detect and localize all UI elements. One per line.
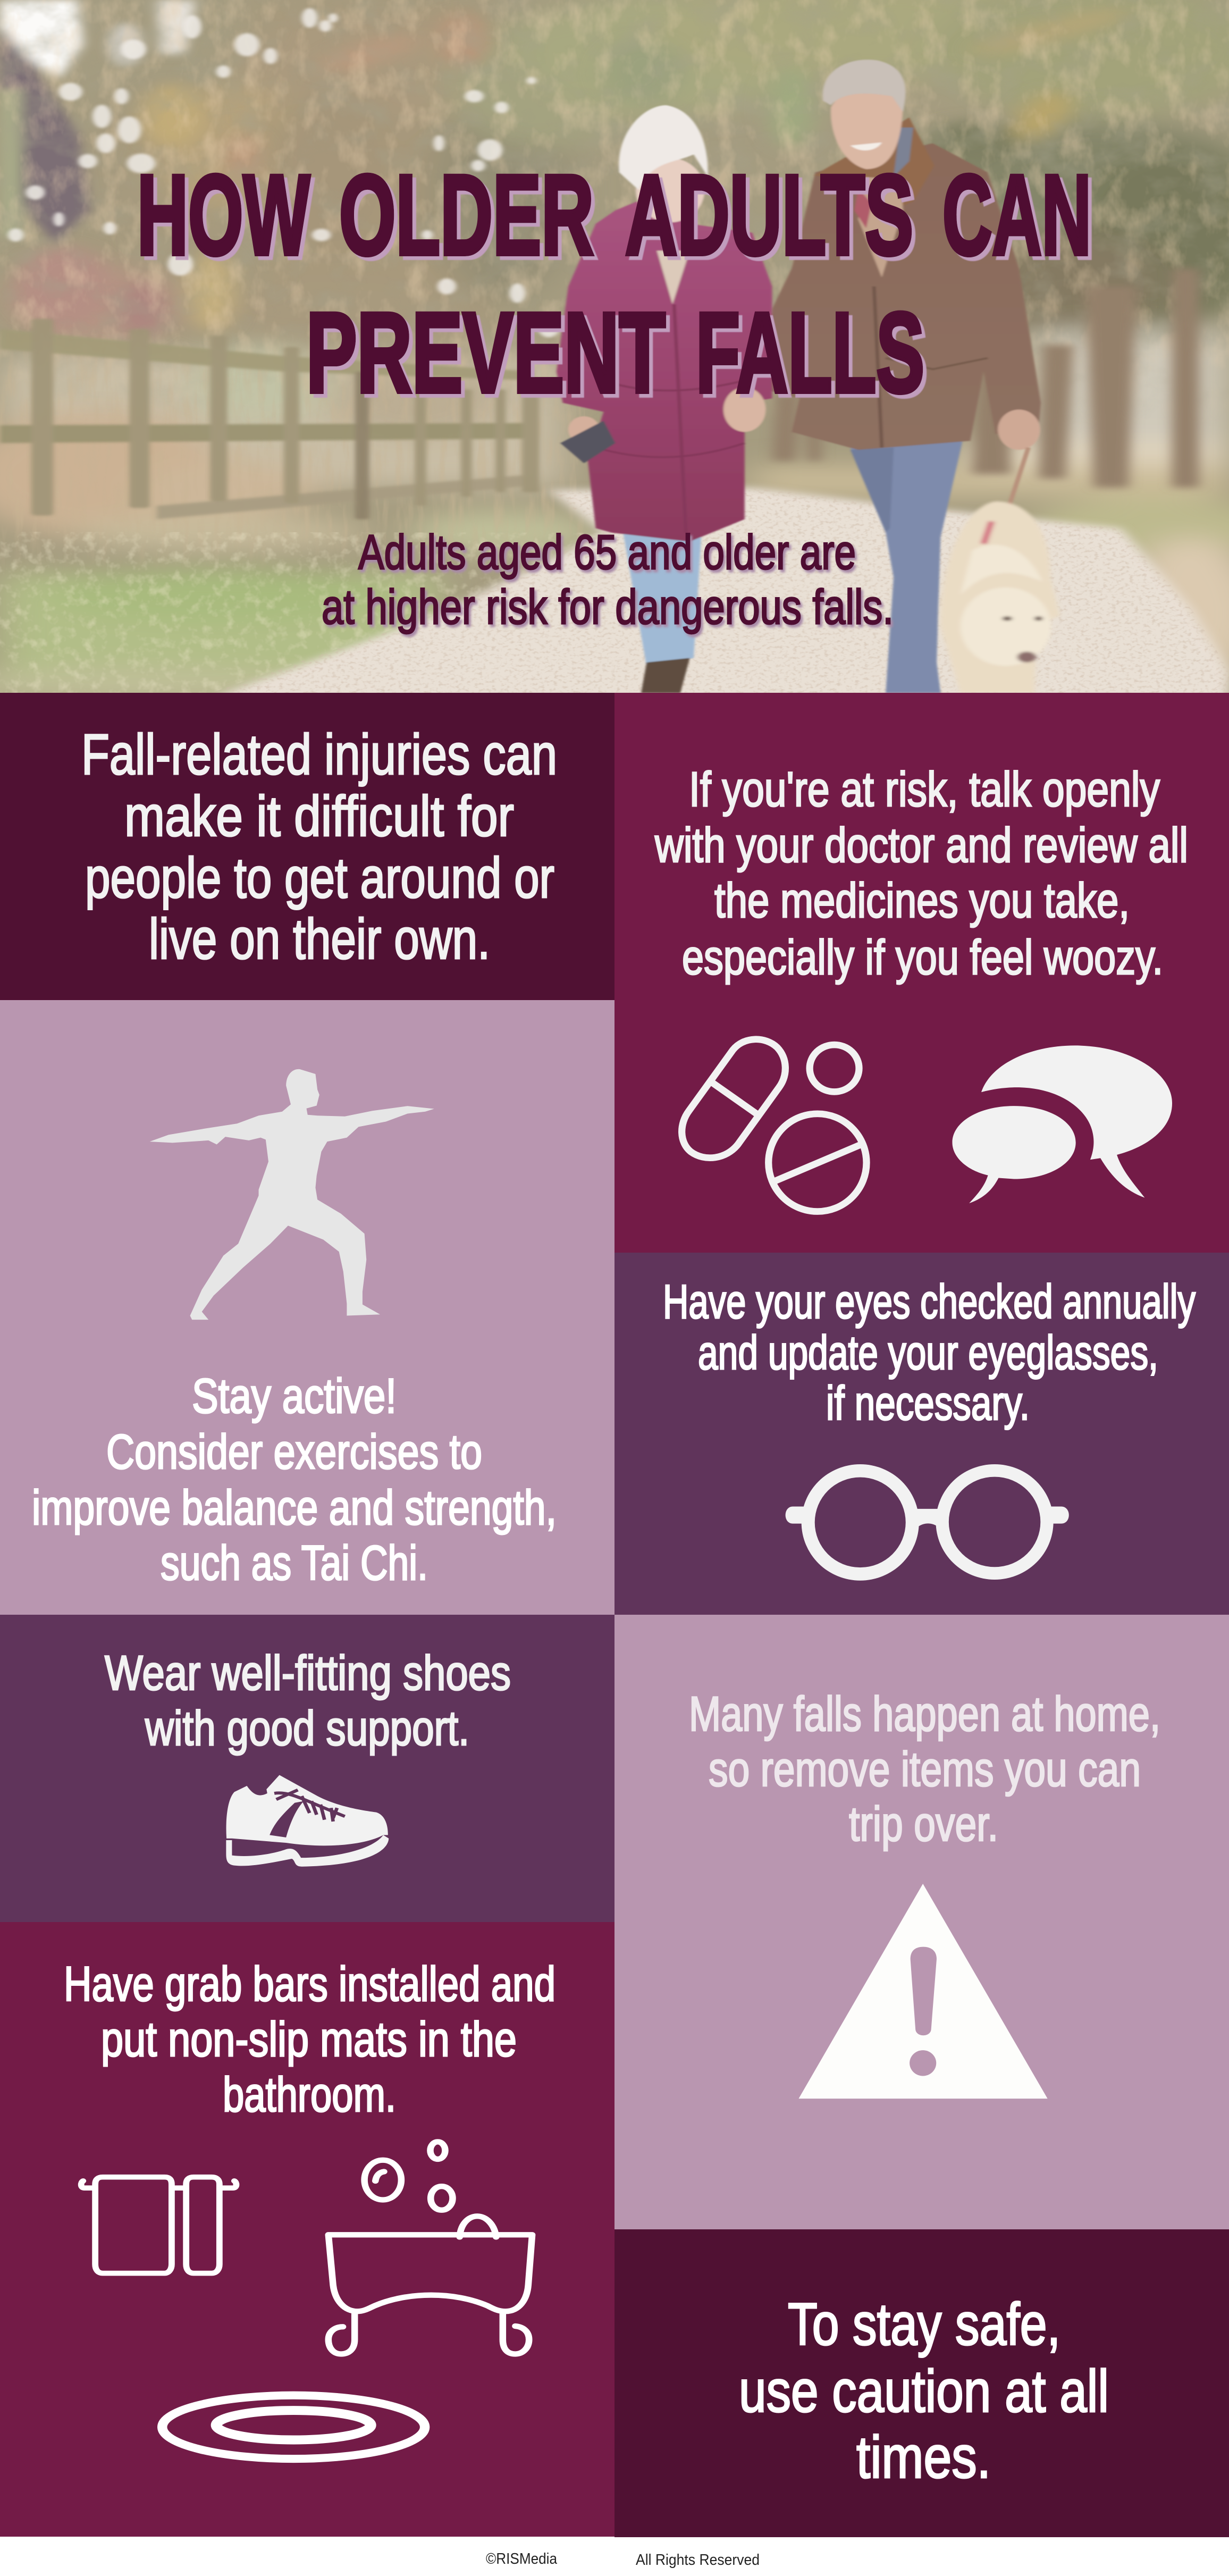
woman (557, 105, 772, 693)
dog (940, 501, 1060, 693)
text: fall-related injuries: make it difficult for (124, 784, 514, 848)
text: bathroom (64, 1957, 555, 2122)
left dark tree and sky (15, 2, 1136, 335)
text: stay safe (739, 2291, 1109, 2490)
panel: home hazards (614, 1615, 1229, 2229)
panel: bathroom safety (0, 1922, 614, 2537)
text: home hazards (689, 1687, 1160, 1851)
text: stay active: Stay active! (192, 1369, 397, 1423)
text: eyes checked: if necessary. (826, 1377, 1030, 1430)
icon: warning triangle (798, 1884, 1048, 2099)
text: fall-related injuries: people to get around or (85, 845, 554, 910)
panel: stay safe closing message (614, 2229, 1229, 2537)
panel: talk to your doctor (614, 693, 1229, 1253)
text: fall-related injuries: live on their own. (149, 907, 490, 971)
distant trunks (772, 268, 1199, 488)
text: eyes checked (663, 1276, 1196, 1430)
text: fall-related injuries (81, 722, 557, 971)
icon: towels on a rail (81, 2177, 236, 2273)
text: fall-related injuries: Fall-related injuries can (81, 722, 557, 786)
text: stay active (32, 1369, 557, 1590)
subtitle (322, 525, 894, 634)
title: CAN (942, 152, 1091, 279)
text: bathroom: bathroom. (223, 2068, 396, 2122)
title: OLDER (339, 152, 594, 279)
bokeh highlights (8, 8, 560, 338)
title: PREVENT (306, 289, 666, 416)
icon: eyeglasses (786, 1464, 1069, 1581)
icon: shoe (226, 1775, 389, 1867)
text: shoes: Wear well-fitting shoes (105, 1646, 511, 1700)
title: ADULTS (625, 152, 913, 279)
icon: non-slip bath mat (162, 2395, 425, 2459)
panel: fall-related injuries (0, 693, 614, 1000)
text: stay safe: To stay safe, (788, 2291, 1060, 2357)
text: stay safe: times. (856, 2424, 991, 2490)
wooden fence (0, 318, 539, 519)
gravel path (212, 488, 1229, 698)
text: stay active: such as Tai Chi. (161, 1536, 428, 1590)
icon: person in warrior yoga pose (150, 1069, 434, 1320)
panel: hero photo of older couple walking a dog (0, 0, 1229, 703)
panel: well-fitting shoes (0, 1615, 614, 1922)
text: talk to your doctor (654, 762, 1188, 985)
footer credits: ©RISMedia (486, 2550, 558, 2567)
icon: speech bubbles (952, 1045, 1172, 1203)
footer credits: All Rights Reserved (636, 2552, 760, 2569)
text: stay active: improve balance and strength, (32, 1481, 557, 1535)
text: bathroom: Have grab bars installed and (64, 1957, 555, 2011)
icon: pills (682, 1039, 866, 1212)
panel: eyes checked (614, 1253, 1229, 1615)
subtitle: at higher risk for dangerous falls. (322, 580, 894, 634)
grass texture (0, 532, 603, 693)
text: home hazards: trip over. (849, 1797, 998, 1851)
text: shoes (105, 1646, 511, 1756)
title: HOW (137, 152, 310, 279)
text: stay safe: use caution at all (739, 2358, 1109, 2424)
title (137, 152, 1091, 416)
text: shoes: with good support. (145, 1701, 469, 1756)
icon: clawfoot bathtub with bubbles (329, 2142, 532, 2354)
footer credits (486, 2550, 760, 2569)
subtitle: Adults aged 65 and older are (358, 525, 856, 580)
text: stay active: Consider exercises to (106, 1425, 482, 1479)
panel: stay active (0, 1000, 614, 1615)
foliage texture (0, 0, 1229, 365)
text: talk to your doctor: the medicines you take, (714, 874, 1130, 928)
text: bathroom: put non-slip mats in the (101, 2012, 517, 2067)
gravel texture (212, 488, 1229, 693)
man (764, 60, 1041, 693)
title: FALLS (696, 289, 924, 416)
dry grass texture (93, 381, 575, 526)
